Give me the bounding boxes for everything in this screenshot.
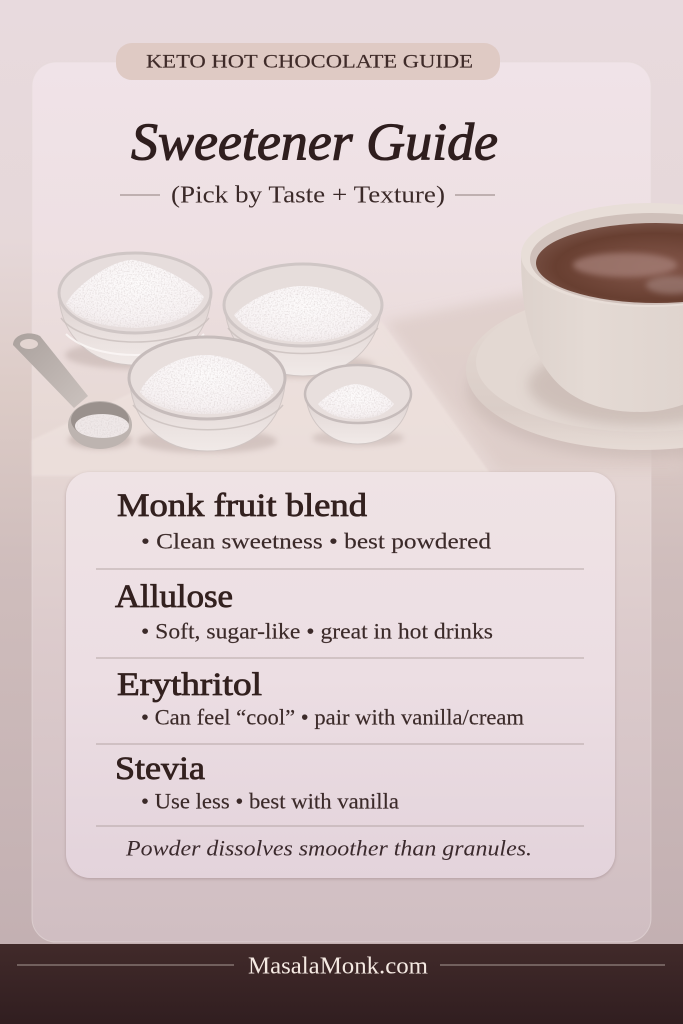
item: erythritol: Erythritol (117, 667, 262, 703)
tip note: Powder dissolves smoother than granules. (125, 836, 532, 860)
item: allulose: Allulose (115, 579, 233, 615)
bowl: top left (59, 253, 211, 369)
subtitle with rules: (Pick by Taste + Texture) (171, 182, 445, 208)
item: monk fruit blend: • Clean sweetness • best powdered (141, 528, 491, 554)
image: cup and saucer (466, 203, 683, 458)
bowl: front centre (129, 337, 285, 453)
badge: guide label (116, 43, 500, 80)
panel: main translucent sheet (32, 62, 651, 942)
badge: guide label: KETO HOT CHOCOLATE GUIDE (146, 52, 473, 72)
paper fold highlight (32, 322, 492, 476)
item: monk fruit blend (117, 488, 491, 554)
cup (521, 203, 683, 412)
item: allulose (115, 579, 493, 644)
item: erythritol (117, 667, 524, 730)
hot chocolate (536, 223, 683, 303)
bowl: small right (305, 365, 411, 446)
item: stevia: Stevia (115, 751, 205, 787)
measuring spoon (13, 333, 132, 449)
item: allulose: • Soft, sugar-like • great in hot drinks (141, 618, 493, 644)
title: Sweetener Guide (131, 114, 498, 172)
item: monk fruit blend: Monk fruit blend (117, 488, 367, 524)
website: MasalaMonk.com (248, 954, 428, 980)
image: sweetener bowls (13, 253, 411, 453)
table shadow (385, 260, 683, 472)
item: erythritol: • Can feel “cool” • pair with vanilla/cream (141, 704, 524, 730)
panel: sweetener list card (66, 472, 615, 878)
item: stevia: • Use less • best with vanilla (141, 788, 399, 814)
bowl: top right (224, 264, 382, 378)
item: stevia (115, 751, 399, 814)
saucer (466, 290, 683, 458)
footer band (0, 944, 683, 1024)
